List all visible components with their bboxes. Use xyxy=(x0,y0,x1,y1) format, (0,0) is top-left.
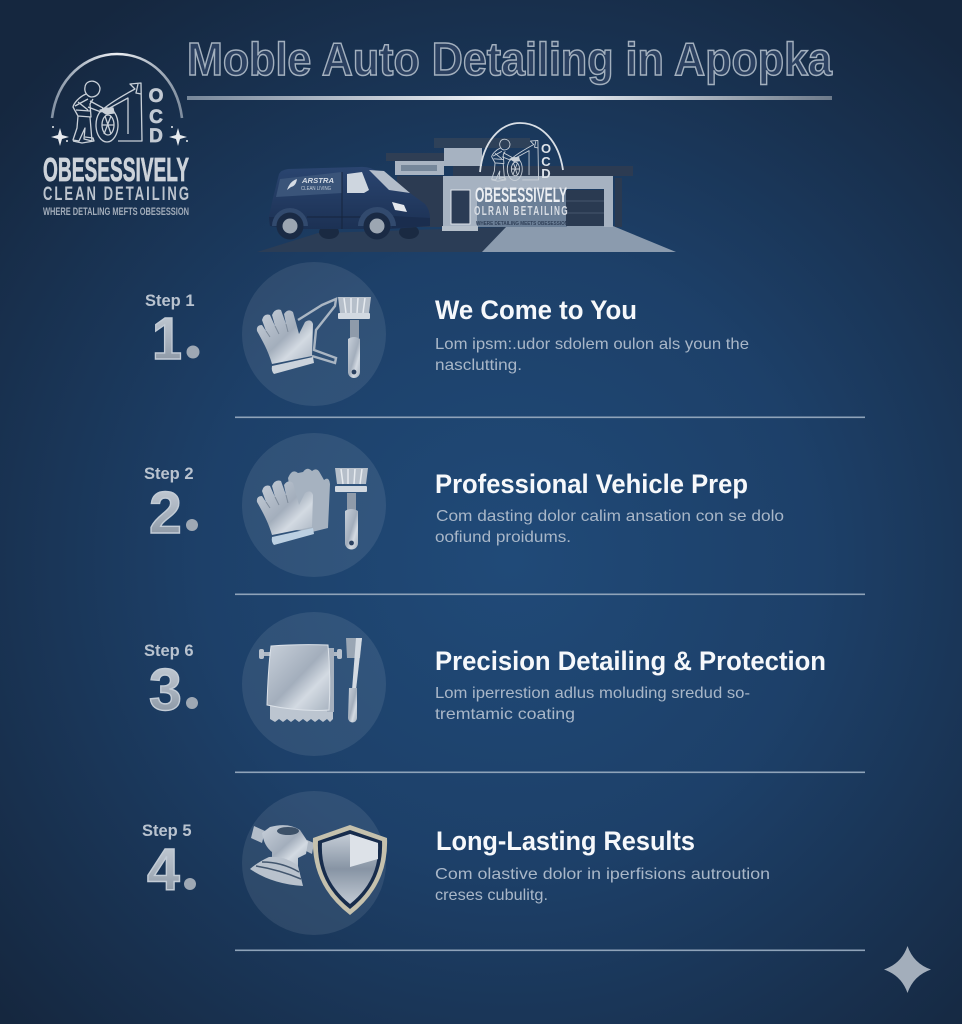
step 3 text: Lom iperrestion adlus moluding sredud so- xyxy=(435,685,750,702)
step 4 icon: shield xyxy=(313,825,387,915)
van: ARSTRA xyxy=(301,176,334,185)
building sign: tagline: WHERE DETAILING MEETS OBESESSION xyxy=(476,221,568,227)
logo: Obsessively Clean Detailing xyxy=(43,54,191,218)
divider 2 xyxy=(235,594,865,595)
step 1 number xyxy=(152,306,200,372)
step 4 xyxy=(142,791,387,935)
divider 4 xyxy=(235,950,865,951)
step 2 xyxy=(144,433,386,577)
step 1 text: Lom ipsm:.udor sdolem oulon als youn the xyxy=(435,336,749,353)
building sign: arc xyxy=(480,123,563,172)
step 3 icon: towel and brush xyxy=(259,638,362,722)
logo OCD letters xyxy=(149,86,163,147)
logo wordmark: OBESESSIVELY xyxy=(43,151,189,188)
building sign: name: OBESESSIVELY xyxy=(475,184,567,207)
step 2 heading: Professional Vehicle Prep xyxy=(435,469,748,499)
building sign: figure xyxy=(492,139,539,181)
icon: sparkle xyxy=(884,946,931,993)
driveway xyxy=(482,226,676,252)
step 1 text xyxy=(435,336,749,374)
title underline xyxy=(187,96,832,100)
step 4 text xyxy=(435,866,770,904)
step 1 label: Step 1 xyxy=(145,292,195,310)
step 4 text: creses cubulitg. xyxy=(435,887,548,904)
step 3 heading: Precision Detailing & Protection xyxy=(435,646,826,676)
building sign: OCD: D xyxy=(541,166,551,181)
logo subtitle: CLEAN DETAILING xyxy=(43,183,191,205)
step 3 icon circle xyxy=(242,612,386,756)
step 3 number xyxy=(149,657,198,723)
step 1 icon: glove, tool and brush xyxy=(257,297,371,378)
title: Moble Auto Detailing in Apopka xyxy=(187,33,832,85)
step 4 icon circle xyxy=(242,791,386,935)
step 2 number: 2 xyxy=(149,480,182,546)
step 4 heading: Long-Lasting Results xyxy=(436,826,695,856)
step 2 number xyxy=(149,480,198,546)
step 1 number: 1 xyxy=(152,306,182,372)
step 2 icon circle xyxy=(242,433,386,577)
step 3 text xyxy=(435,685,750,723)
logo OCD letters: O xyxy=(149,86,163,107)
illustration: van and building xyxy=(257,123,676,252)
logo arc xyxy=(52,54,182,118)
step 2 text: oofiund proidums. xyxy=(435,529,571,546)
step 2 text xyxy=(435,508,784,546)
step 4 icon: orbital polisher xyxy=(250,825,314,886)
step 4 text: Com olastive dolor in iperfisions autroution xyxy=(435,866,770,883)
step 2 label: Step 2 xyxy=(144,465,194,483)
divider 1 xyxy=(235,416,865,418)
step 3 label: Step 6 xyxy=(144,642,194,660)
divider 3 xyxy=(235,772,865,773)
logo OCD letters: C xyxy=(149,107,163,128)
logo OCD letters: D xyxy=(149,126,163,147)
step 1 icon circle xyxy=(242,262,386,406)
step 1 text: nasclutting. xyxy=(435,357,522,374)
logo figure polishing car xyxy=(73,81,142,143)
step 4 label: Step 5 xyxy=(142,822,192,840)
building sign: subtitle: OLRAN BETAILING xyxy=(474,204,569,218)
ground xyxy=(257,227,507,252)
step 2 text: Com dasting dolor calim ansation con se dolo xyxy=(436,508,784,525)
step 3 number: 3 xyxy=(149,657,182,723)
step 4 number xyxy=(147,837,196,903)
building sign: OCD xyxy=(541,141,551,181)
building sign: OCD: C xyxy=(541,154,551,169)
building xyxy=(386,138,633,231)
step 2 icon: gloves and brush xyxy=(257,468,368,550)
building sign: OCD: O xyxy=(541,141,551,156)
logo sparkles xyxy=(51,126,188,146)
step 4 number: 4 xyxy=(147,837,180,903)
step 1 xyxy=(145,262,386,406)
step 3 text: tremtamic coating xyxy=(435,706,575,723)
van xyxy=(269,167,430,240)
step 3 xyxy=(144,612,386,756)
step 1 heading: We Come to You xyxy=(435,295,637,325)
logo tagline: WHERE DETALING MEFTS OBESESSION xyxy=(43,206,189,218)
van: CLEAN LIVING xyxy=(301,186,331,192)
